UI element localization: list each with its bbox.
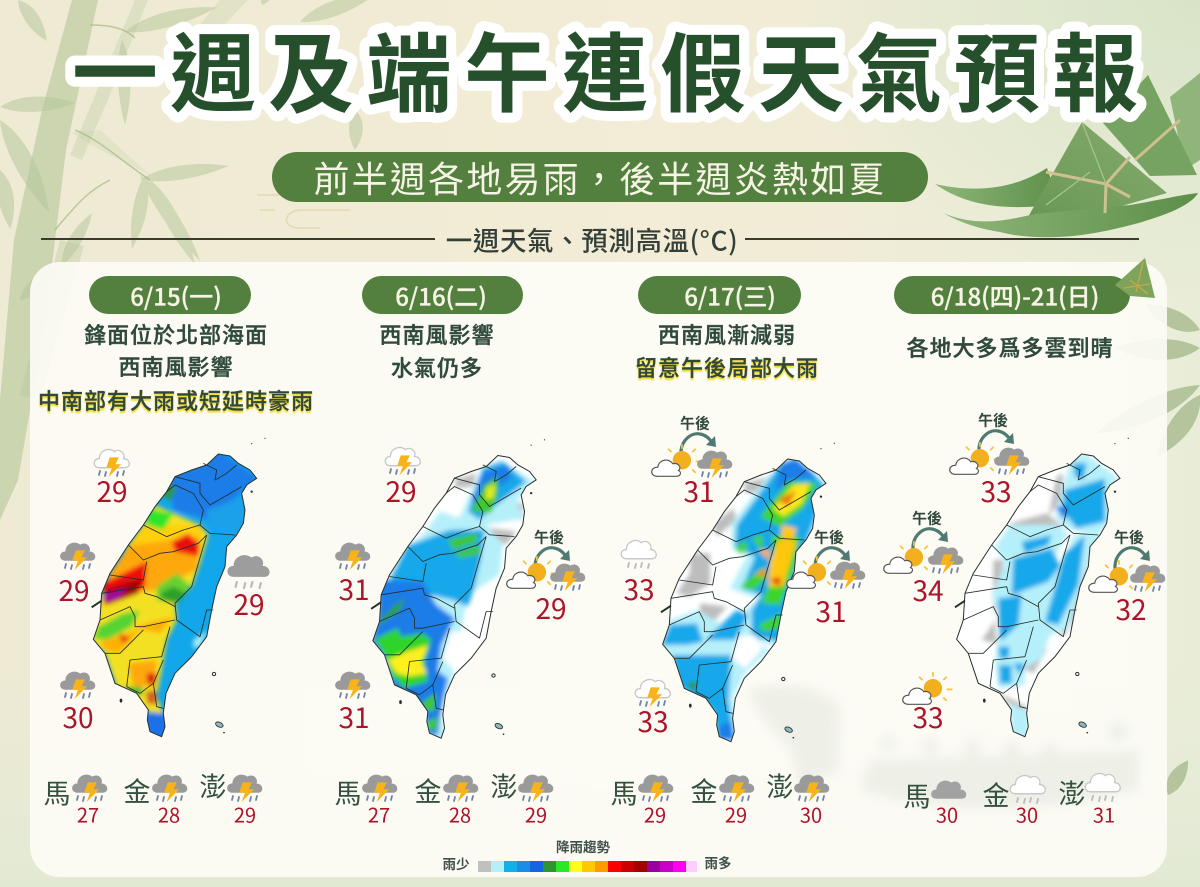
rainfall map 6/17 [658, 443, 835, 742]
outlying islands 6/16: 澎 [490, 766, 518, 804]
description 6/15: 西南風影響 [118, 350, 234, 382]
description 6/17: 西南風漸減弱 [658, 318, 796, 350]
outlying islands 6/15: 28 [158, 800, 180, 828]
forecast icons and temperatures 6/16: 29 [385, 471, 417, 511]
rainfall map 6/16 [368, 439, 545, 740]
afternoon change 6/16 east [507, 526, 585, 591]
forecast icons and temperatures 6/18-21: 33 [980, 471, 1012, 511]
outlying islands 6/16: 27 [368, 800, 390, 828]
outlying islands 6/18-21: 馬 [904, 776, 930, 814]
section heading with rules: 一週天氣、預測高溫(°C) [446, 220, 738, 258]
outlying islands 6/18-21 [904, 772, 1120, 828]
outlying islands 6/16 [334, 766, 553, 828]
date pill 6/17: 6/17(三) [684, 278, 776, 312]
subtitle banner: 前半週各地易雨，後半週炎熱如夏 [313, 151, 887, 203]
forecast icons and temperatures 6/15: 30 [62, 697, 94, 737]
description 6/15: 中南部有大雨或短延時豪雨 [38, 384, 314, 416]
rainfall legend: 雨少 [442, 853, 470, 873]
afternoon change 6/18 west [884, 508, 963, 574]
forecast icons and temperatures 6/16 [335, 448, 585, 737]
forecast icons and temperatures 6/18-21: 33 [912, 697, 944, 737]
outlying islands 6/18-21: 30 [936, 800, 958, 828]
description 6/17 [635, 318, 819, 383]
outlying islands 6/15: 金 [124, 770, 150, 810]
afternoon change 6/18 west: 午後 [912, 508, 942, 528]
bamboo decoration left [0, 0, 377, 520]
panel: 6/15 [38, 276, 314, 828]
afternoon change 6/16 east: 午後 [534, 526, 564, 548]
outlying islands 6/17 [610, 766, 829, 828]
description 6/16: 水氣仍多 [391, 351, 483, 383]
date pill 6/16 [362, 276, 523, 314]
panel: 6/18-21 [884, 258, 1165, 828]
afternoon change 6/18 north [950, 410, 1029, 475]
rainfall map 6/15 [88, 438, 266, 742]
rainfall legend [442, 836, 732, 873]
description 6/16: 西南風影響 [379, 318, 495, 350]
outlying islands 6/17: 29 [725, 800, 747, 828]
afternoon change 6/18 east: 午後 [1114, 526, 1144, 548]
outlying islands 6/16: 金 [414, 770, 442, 810]
afternoon change 6/17 east [787, 526, 865, 589]
date pill 6/16: 6/16(二) [395, 278, 487, 312]
panel: 6/17 [610, 276, 865, 828]
forecast icons and temperatures 6/15: 29 [58, 570, 90, 610]
outlying islands 6/16: 28 [449, 800, 471, 828]
date pill 6/15 [89, 276, 251, 314]
forecast icons and temperatures 6/17 [621, 412, 865, 741]
outlying islands 6/17: 金 [690, 770, 718, 810]
small zongzi icon [1115, 258, 1155, 298]
bamboo leaves right [1092, 298, 1200, 798]
outlying islands 6/18-21: 30 [1016, 800, 1038, 828]
afternoon change 6/17 north [652, 412, 732, 478]
afternoon change 6/18 north: 午後 [978, 410, 1008, 430]
forecast icons and temperatures 6/18-21: 32 [1115, 589, 1147, 629]
outlying islands 6/15: 29 [234, 800, 256, 828]
forecast icons and temperatures 6/17: 33 [623, 569, 655, 609]
date pill 6/17 [638, 276, 801, 314]
rainfall legend: 降雨趨勢 [556, 836, 610, 856]
outlying islands 6/16: 馬 [334, 772, 362, 812]
date pill 6/15: 6/15(一) [130, 278, 222, 312]
outlying islands 6/17: 29 [644, 800, 666, 828]
date pill 6/18-21 [894, 276, 1130, 314]
forecast icons and temperatures 6/15: 29 [96, 471, 128, 511]
afternoon change 6/17 east: 午後 [814, 526, 844, 548]
outlying islands 6/15 [44, 766, 262, 828]
panel: 6/16 [334, 276, 585, 828]
forecast icons and temperatures 6/15: 29 [233, 584, 265, 624]
forecast icons and temperatures 6/17: 33 [637, 701, 669, 741]
description 6/15 [38, 318, 314, 416]
forecast icons and temperatures 6/18-21: 34 [912, 570, 944, 610]
outlying islands 6/18-21: 金 [982, 774, 1010, 814]
outlying islands 6/17: 澎 [766, 766, 794, 804]
title: 一週及端午連假天氣預報 [72, 4, 1150, 130]
outlying islands 6/15: 27 [77, 800, 99, 828]
afternoon change 6/18 east [1089, 526, 1165, 592]
outlying islands 6/17: 30 [800, 800, 822, 828]
date pill 6/18-21: 6/18(四)-21(日) [931, 278, 1099, 312]
outlying islands 6/18-21: 31 [1093, 800, 1115, 828]
dragon boat watermark [748, 685, 1140, 809]
forecast icons and temperatures 6/17: 31 [815, 591, 847, 631]
forecast icons and temperatures 6/18-21 [884, 410, 1165, 737]
rainfall map 6/18-21 [955, 438, 1129, 738]
cloud decoration [257, 195, 350, 228]
description 6/18-21: 各地大多爲多雲到晴 [906, 331, 1114, 363]
forecast icons and temperatures 6/15 [58, 450, 270, 737]
outlying islands 6/15: 澎 [200, 766, 226, 804]
afternoon change 6/17 north: 午後 [680, 412, 710, 434]
forecast icons and temperatures 6/16: 31 [338, 697, 370, 737]
forecast icons and temperatures 6/16: 31 [338, 569, 370, 609]
forecast icons and temperatures 6/17: 31 [683, 471, 715, 511]
outlying islands 6/17: 馬 [610, 772, 638, 812]
main panel [30, 262, 1167, 877]
outlying islands 6/16: 29 [525, 800, 547, 828]
zongzi decoration [935, 73, 1200, 237]
description 6/17: 留意午後局部大雨 [635, 351, 819, 383]
outlying islands 6/18-21: 澎 [1058, 772, 1086, 812]
description 6/15: 鋒面位於北部海面 [84, 318, 268, 350]
forecast icons and temperatures 6/16: 29 [535, 588, 567, 628]
legend colour bar [478, 861, 697, 872]
outlying islands 6/15: 馬 [44, 772, 70, 812]
description 6/16 [379, 318, 495, 383]
rainfall legend: 雨多 [704, 852, 732, 872]
